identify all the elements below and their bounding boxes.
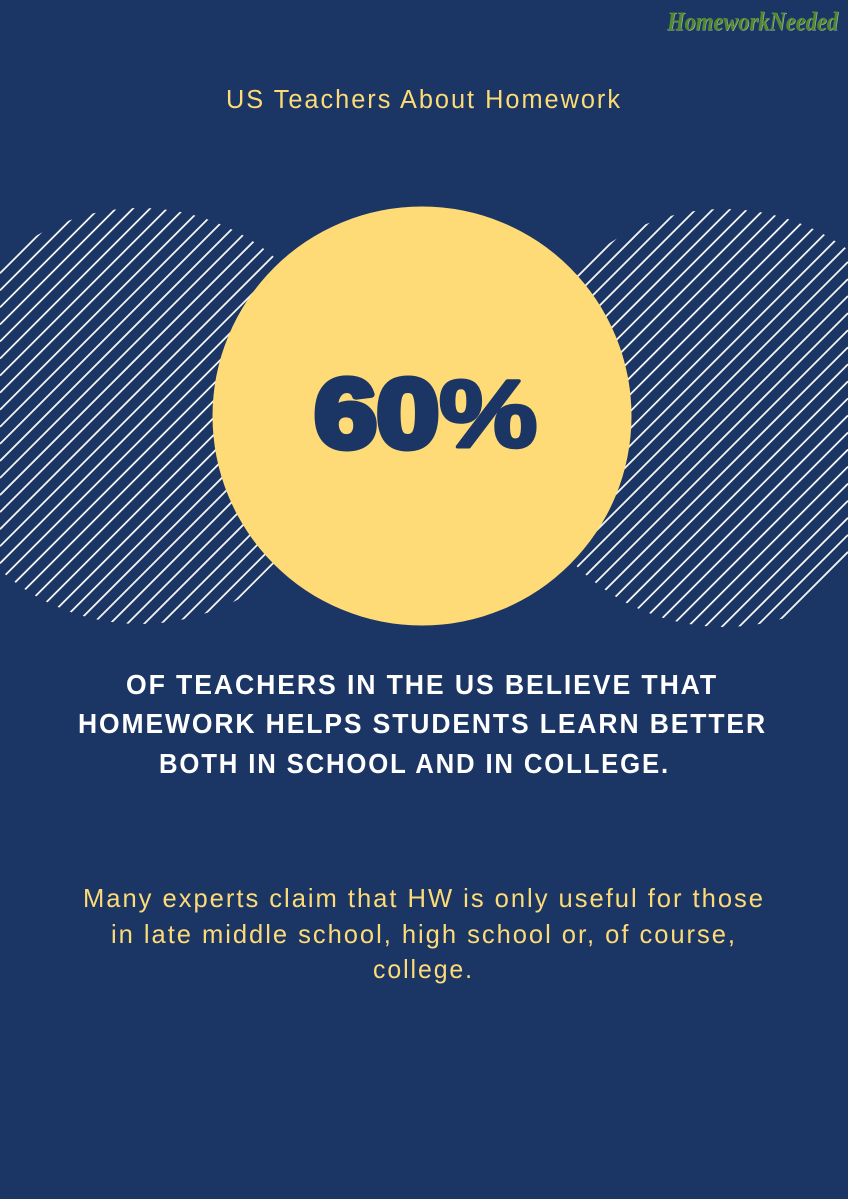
striped circle: left: [0, 208, 274, 624]
statistic: 60%: 60%: [314, 359, 538, 468]
body text: experts claim: college.: [373, 954, 474, 984]
yellow circle: [212, 206, 632, 626]
body text: experts claim: in late middle school, high school or, of course,: [111, 919, 737, 949]
heading: teachers statement: OF TEACHERS IN THE US BELIEVE THAT: [126, 669, 718, 700]
heading: teachers statement: HOMEWORK HELPS STUDENTS LEARN BETTER: [78, 708, 767, 739]
body text: experts claim: [83, 883, 765, 984]
body text: experts claim: Many experts claim that HW is only useful for those: [83, 883, 765, 913]
heading: teachers statement: BOTH IN SCHOOL AND IN COLLEGE.: [159, 748, 670, 779]
striped circle: right: [576, 209, 848, 627]
title: US Teachers About Homework: [226, 86, 622, 114]
heading: teachers statement: [78, 669, 767, 779]
